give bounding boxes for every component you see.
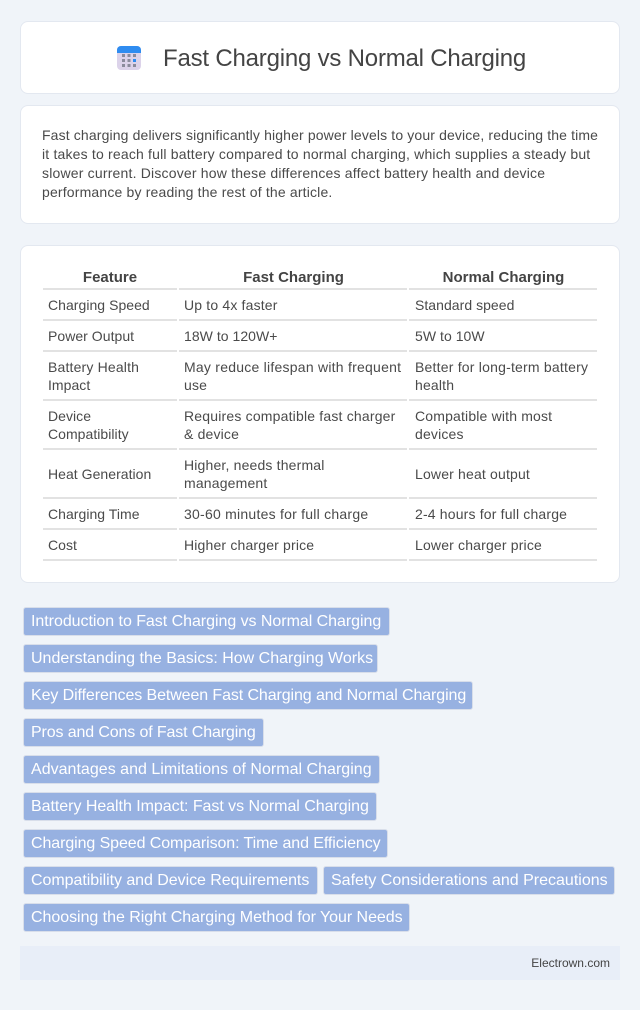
- tag: basics: [23, 644, 378, 673]
- row: charging time: [48, 506, 567, 522]
- table header: Feature: [83, 269, 137, 286]
- row: battery health impact: Battery Health: [48, 359, 139, 375]
- row: device compatibility: [48, 408, 552, 442]
- table header: Fast Charging: [243, 269, 344, 286]
- footer text: Electrown.com: [531, 956, 610, 970]
- tag: basics: Understanding the Basics: How Charging Works: [31, 650, 373, 667]
- tag: choosing: Choosing the Right Charging Method for Your Needs: [31, 909, 403, 926]
- row: charging speed: Up to 4x faster: [184, 297, 278, 313]
- tag: introduction: [23, 607, 390, 636]
- intro text: [42, 127, 598, 200]
- tag: pros and cons: Pros and Cons of Fast Charging: [31, 724, 256, 741]
- row: cost: Cost: [48, 537, 77, 553]
- row: heat generation: management: [184, 475, 267, 491]
- row: cost: Higher charger price: [184, 537, 314, 553]
- tag: speed comparison: [23, 829, 388, 858]
- tag: advantages: [23, 755, 380, 784]
- row: device compatibility: devices: [415, 426, 464, 442]
- tag: compatibility: Compatibility and Device Requirements: [31, 872, 309, 889]
- panel: intro: [20, 105, 620, 224]
- row: charging time: 30-60 minutes for full charge: [184, 506, 368, 522]
- tag: battery health: [23, 792, 377, 821]
- tag: safety: [323, 866, 615, 895]
- row: power output: [48, 328, 485, 344]
- row: charging time: Charging Time: [48, 506, 140, 522]
- row: battery health impact: use: [184, 377, 207, 393]
- row: charging speed: Standard speed: [415, 297, 514, 313]
- tag: key differences: [23, 681, 473, 710]
- tag: compatibility: [23, 866, 318, 895]
- tag: safety: Safety Considerations and Precautions: [331, 872, 608, 889]
- row: device compatibility: Device: [48, 408, 91, 424]
- panel: comparison table: [20, 245, 620, 583]
- tag: choosing: [23, 903, 410, 932]
- tag: key differences: Key Differences Between Fast Charging and Normal Charging: [31, 687, 466, 704]
- row: heat generation: Lower heat output: [415, 466, 530, 482]
- tag: pros and cons: [23, 718, 264, 747]
- tag: speed comparison: Charging Speed Comparison: Time and Efficiency: [31, 835, 381, 852]
- footer: [20, 946, 620, 980]
- row: battery health impact: May reduce lifespan with frequent: [184, 359, 401, 375]
- row: charging time: 2-4 hours for full charge: [415, 506, 567, 522]
- row: cost: [48, 537, 542, 553]
- intro text: performance by reading the rest of the article.: [42, 184, 332, 200]
- intro text: slower current. Discover how these differences affect battery health and device: [42, 165, 545, 181]
- intro text: Fast charging delivers significantly higher power levels to your device, reducing the time: [42, 127, 598, 143]
- panel: title card: [20, 21, 620, 94]
- row: device compatibility: Requires compatible fast charger: [184, 408, 396, 424]
- row: charging speed: [48, 297, 514, 313]
- row: heat generation: [48, 457, 530, 491]
- row: heat generation: Heat Generation: [48, 466, 151, 482]
- row: cost: Lower charger price: [415, 537, 542, 553]
- intro text: it takes to reach full battery compared to normal charging, which supplies a steady but: [42, 146, 590, 162]
- tag: advantages: Advantages and Limitations of Normal Charging: [31, 761, 372, 778]
- row: charging speed: Charging Speed: [48, 297, 150, 313]
- row: device compatibility: & device: [184, 426, 239, 442]
- table header: [83, 269, 564, 286]
- row: power output: 5W to 10W: [415, 328, 485, 344]
- row: battery health impact: Impact: [48, 377, 90, 393]
- row: battery health impact: health: [415, 377, 454, 393]
- icon: calendar: [117, 46, 141, 70]
- title: Fast Charging vs Normal Charging: [163, 45, 526, 72]
- tag: introduction: Introduction to Fast Charging vs Normal Charging: [31, 613, 381, 630]
- row: battery health impact: Better for long-term battery: [415, 359, 588, 375]
- row: power output: 18W to 120W+: [184, 328, 277, 344]
- row: device compatibility: Compatible with most: [415, 408, 552, 424]
- row: device compatibility: Compatibility: [48, 426, 129, 442]
- row: heat generation: Higher, needs thermal: [184, 457, 325, 473]
- table header: Normal Charging: [443, 269, 564, 286]
- row: battery health impact: [48, 359, 588, 393]
- row: power output: Power Output: [48, 328, 134, 344]
- tag: battery health: Battery Health Impact: Fast vs Normal Charging: [31, 798, 369, 815]
